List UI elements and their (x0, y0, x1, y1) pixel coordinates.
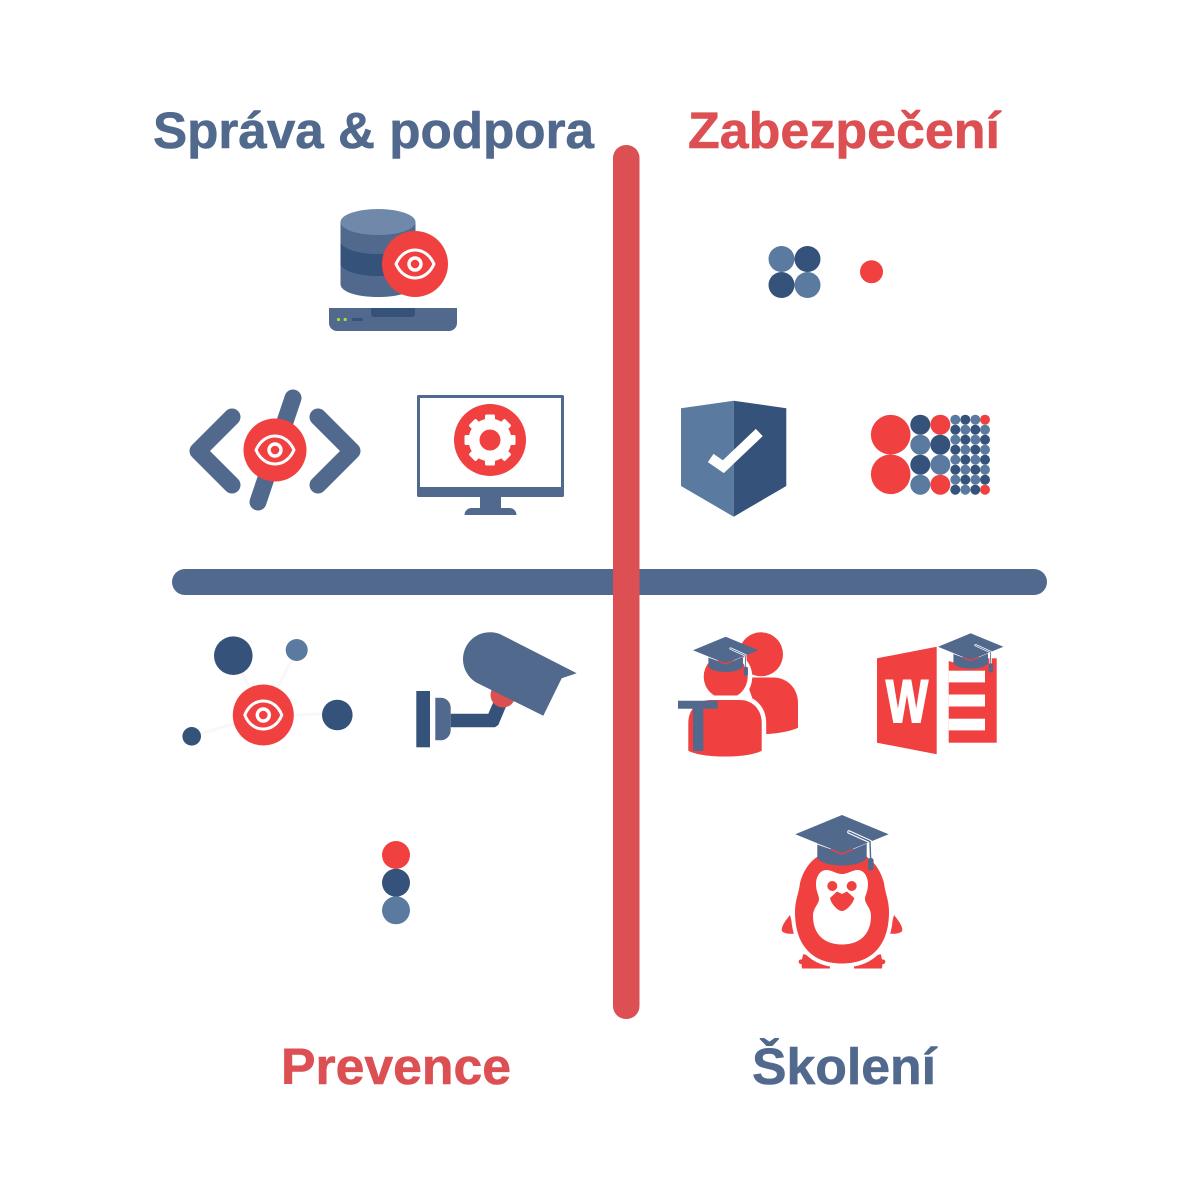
front person (688, 655, 762, 757)
icon: database server with eye (329, 209, 457, 331)
heading: Správa & podpora: Správa & podpora (153, 102, 595, 159)
icon: monitor with gear (417, 395, 564, 515)
code symbols (198, 398, 352, 502)
vertical axis bar (613, 145, 640, 1019)
graduation cap (795, 815, 889, 870)
eye badge (382, 231, 448, 297)
gear badge (454, 404, 526, 476)
monitor (417, 395, 564, 515)
heading: Zabezpečení: Zabezpečení (688, 102, 1002, 159)
server base (329, 308, 457, 331)
rear person (739, 632, 798, 734)
icon: halftone dot grid (871, 415, 990, 495)
T mark (678, 701, 718, 751)
heading: Školení: Školení (752, 1037, 938, 1095)
icon: people with graduation cap (678, 632, 798, 757)
white gap behind cap (937, 647, 1004, 668)
feet (799, 954, 885, 968)
heading: Prevence: Prevence (281, 1038, 511, 1095)
eyes (827, 881, 837, 891)
flippers (782, 915, 902, 934)
icon: security camera (416, 632, 577, 747)
icon: shield with check (681, 401, 786, 517)
icon: penguin with graduation cap (782, 815, 902, 968)
graduation cap (938, 633, 1003, 672)
icon: Word document with graduation cap (877, 633, 1004, 754)
icon: four dots and red dot (768, 246, 883, 298)
graduation cap (693, 637, 758, 676)
horizontal axis bar (172, 569, 1047, 595)
database cylinder (340, 209, 416, 297)
icon: three stacked dots (382, 841, 410, 924)
icon: network with eye (182, 636, 353, 746)
belly (813, 870, 871, 944)
eye badge (233, 684, 294, 746)
beak (830, 892, 854, 911)
eye badge (244, 418, 306, 482)
icon: code brackets with eye (198, 398, 352, 502)
body (795, 850, 889, 964)
icon: Word document with graduation cap: W (886, 668, 928, 735)
